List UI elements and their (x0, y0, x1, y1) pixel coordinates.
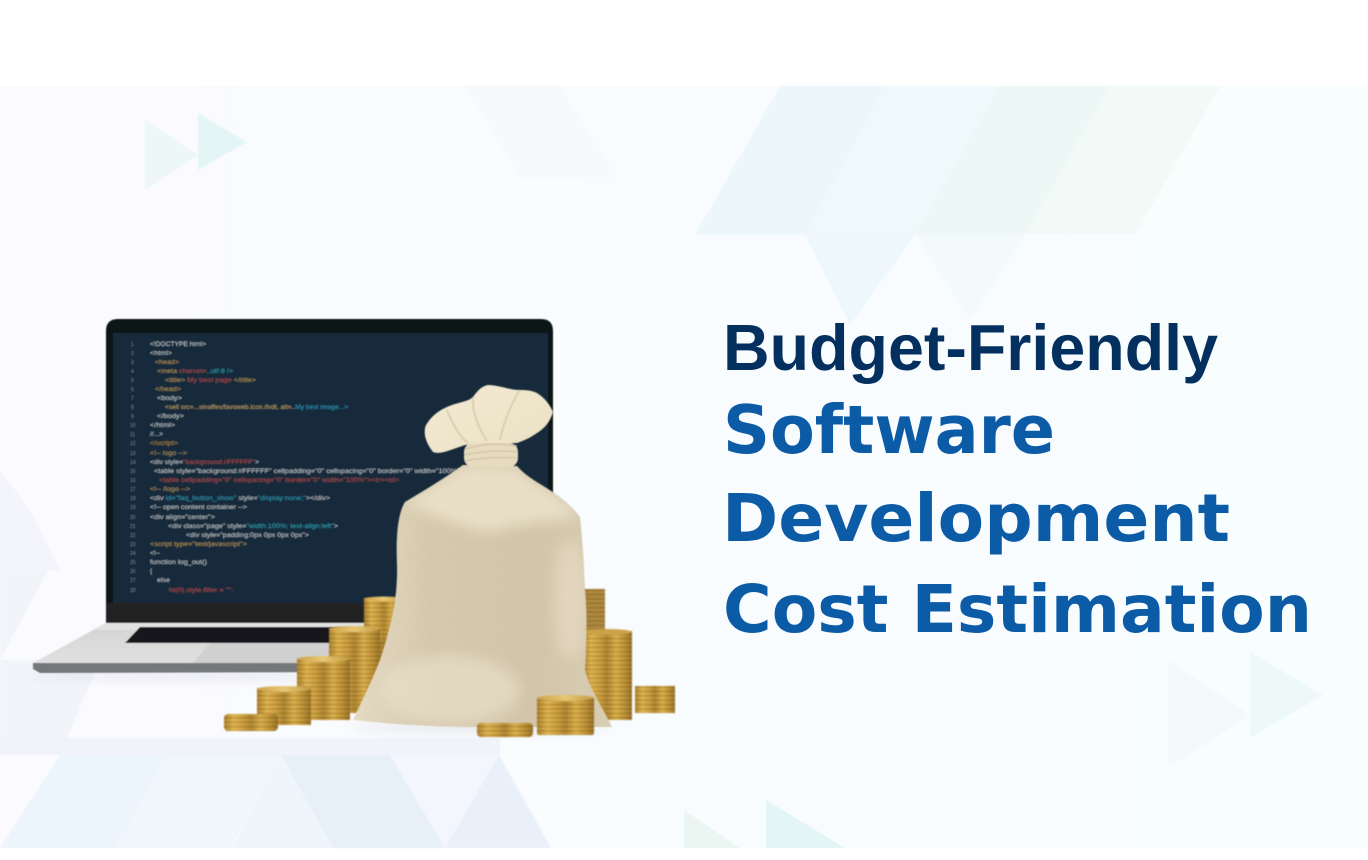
title line: Development: Development (722, 480, 1230, 557)
background triangle pattern: left and bottom (0, 470, 551, 848)
coin stack (380, 640, 402, 710)
line numbers: 19 (130, 505, 136, 511)
icon: double arrow top left (145, 113, 247, 190)
title line: Cost Estimation: Cost Estimation (723, 571, 1312, 648)
background triangle pattern: upper right (465, 86, 1220, 325)
line numbers: 7 (131, 396, 134, 402)
line numbers: 21 (130, 524, 136, 530)
title line: Software: Software (723, 391, 1055, 469)
code listing: { (150, 568, 153, 575)
line numbers: 25 (130, 560, 136, 566)
line numbers: 24 (130, 551, 136, 557)
line numbers: 3 (131, 360, 134, 366)
coin stack (364, 596, 404, 663)
bag upper fold (405, 465, 579, 533)
bag shadow (350, 725, 610, 731)
code listing: //...> (150, 431, 163, 438)
code listing: <div style="padding:0px 0px 0px 0px"> (186, 532, 309, 539)
trackpad (193, 643, 340, 663)
coin stack (224, 714, 278, 731)
bag shading (380, 465, 586, 725)
coin stack (257, 686, 311, 725)
coin stack (297, 656, 350, 720)
code listing: <!-- logo --> (150, 450, 187, 457)
code listing: <!-- (150, 550, 160, 557)
bag body (353, 465, 612, 727)
coin stack (582, 629, 632, 720)
line numbers: 20 (130, 515, 136, 521)
code listing: else (157, 577, 170, 584)
money bag (350, 385, 612, 731)
line numbers: 17 (130, 487, 136, 493)
ruffle folds (447, 390, 520, 443)
coin stack (329, 626, 380, 713)
coin stacks behind bag (224, 589, 675, 731)
code listing: <!-- open content container --> (150, 504, 247, 511)
line numbers: 16 (130, 478, 136, 484)
title (722, 311, 1312, 648)
code listing: <table style="background:#FFFFFF" cellpadding="0" cellspacing="0" border="0" width="100%"> (154, 468, 464, 475)
line numbers: 10 (130, 423, 136, 429)
code listing: <div style= "background:#FFFFFF" > (150, 459, 259, 466)
line numbers: 27 (130, 578, 136, 584)
line numbers: 23 (130, 542, 136, 548)
coin stack (537, 695, 594, 735)
line numbers: 18 (130, 496, 136, 502)
code listing: function log_out() (150, 559, 207, 566)
laptop shadow (30, 672, 370, 680)
keyboard (125, 627, 350, 643)
code listing: <div id="faq_button_show" style= "display:none;" ></div> (150, 495, 330, 502)
code listing: <meta charset= ..utf-8 /> (157, 368, 233, 375)
code listing (130, 341, 464, 594)
coin stacks in front of bag (477, 695, 594, 737)
line numbers: 2 (131, 351, 134, 357)
code listing: <div class="page" style= "width:100%; text-align:left" > (168, 523, 338, 530)
bag lower highlight (380, 655, 520, 725)
code listing: </body> (157, 413, 184, 420)
code listing: <title> My best page </title> (165, 377, 256, 384)
line numbers: 5 (131, 378, 134, 384)
line numbers: 11 (130, 432, 135, 438)
laptop base (33, 623, 400, 673)
laptop display (113, 333, 548, 603)
line numbers: 13 (130, 451, 136, 457)
code listing: <body> (157, 395, 182, 402)
icon: double arrow bottom right (1168, 652, 1323, 768)
line numbers: 26 (130, 569, 136, 575)
title line: Budget-Friendly: Budget-Friendly (723, 311, 1218, 384)
line numbers: 22 (130, 533, 136, 539)
line numbers: 14 (130, 460, 136, 466)
line numbers: 12 (130, 441, 136, 447)
code listing: <div align="center"> (150, 514, 215, 521)
coin stack (477, 723, 533, 737)
code listing: <table cellpadding="0" cellspacing="0" border="0" width="100%"><tr><td> (159, 477, 399, 484)
code listing: <html> (150, 350, 172, 357)
bag tie rope (464, 443, 518, 467)
line numbers: 28 (130, 588, 136, 594)
coin stack (580, 589, 605, 633)
code listing: </head> (155, 386, 181, 393)
icon: double arrow bottom centre (684, 800, 845, 848)
line numbers (130, 342, 136, 594)
code listing: ht(0).style.filter = ""; (169, 587, 233, 594)
line numbers: 8 (131, 405, 134, 411)
coin stack (635, 686, 675, 713)
line numbers: 6 (131, 387, 134, 393)
code listing: </html> (150, 422, 175, 429)
laptop screen bezel (106, 319, 553, 623)
code listing: </script> (150, 440, 178, 447)
code listing: <!DOCTYPE html> (150, 341, 206, 348)
line numbers: 15 (130, 469, 136, 475)
line numbers: 1 (131, 342, 134, 348)
code listing: <sell src=...sinaffes/favoweb.icon.ifvdt, alt=.. My best image...> (165, 404, 348, 411)
bag ruffle (425, 385, 553, 453)
code listing: <script type="text/javascript"> (150, 541, 247, 548)
laptop (30, 319, 553, 680)
line numbers: 9 (131, 414, 134, 420)
code listing: <head> (155, 359, 179, 366)
code listing: <!-- /logo --> (150, 486, 190, 493)
bag right highlight (554, 540, 586, 660)
line numbers: 4 (131, 369, 134, 375)
